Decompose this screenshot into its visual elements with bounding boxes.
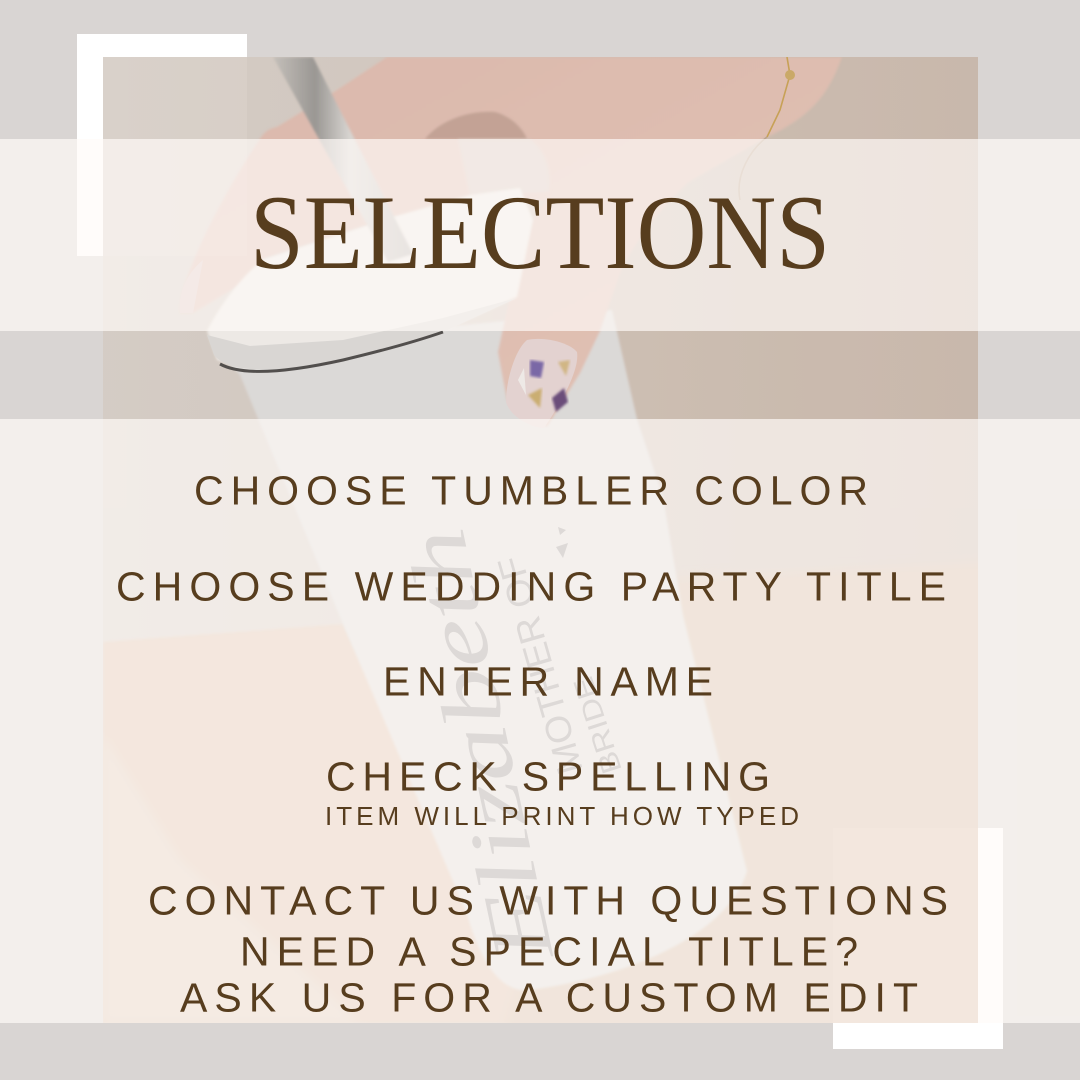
step: spelling: CHECK SPELLING: [326, 754, 770, 800]
decorative corner bracket: top left: [77, 34, 247, 256]
tumbler lid: [207, 188, 533, 370]
instruction list: [116, 468, 948, 1020]
palm and fingers: [260, 57, 842, 425]
photo backdrop wall: [103, 57, 978, 574]
contact line: CONTACT US WITH QUESTIONS: [148, 878, 948, 924]
shadow between fingers: [425, 112, 527, 139]
spelling note: ITEM WILL PRINT HOW TYPED: [325, 801, 799, 831]
special title question: NEED A SPECIAL TITLE?: [240, 928, 858, 974]
small mark: [556, 543, 568, 558]
step: name: ENTER NAME: [383, 658, 713, 704]
custom edit line: ASK US FOR A CUSTOM EDIT: [180, 974, 918, 1020]
nail of index finger: [180, 260, 203, 313]
lid seal line: [220, 332, 443, 371]
wooden table right: [500, 562, 990, 1040]
photo: hand holding a personalised tumbler: [103, 57, 990, 1040]
tumbler personalisation: [411, 527, 621, 956]
wooden table left: [104, 632, 258, 918]
title line one: MOTHER OF: [489, 552, 591, 779]
pale streak on table: [103, 735, 360, 1023]
bracelet: [739, 57, 795, 200]
title line two: BRIDE: [567, 673, 628, 778]
step: tumbler colour: CHOOSE TUMBLER COLOR: [194, 468, 868, 514]
translucent title band: [0, 139, 1080, 331]
metal straw: [273, 57, 413, 262]
script name: Elizabeth: [389, 521, 572, 972]
step: party title: CHOOSE WEDDING PARTY TITLE: [116, 564, 946, 610]
lid rim: [208, 331, 444, 369]
decorative corner bracket: bottom right: [833, 828, 1003, 1049]
tumbler body: [217, 310, 747, 990]
title: SELECTIONS: [250, 174, 830, 291]
painted thumb nail: [506, 339, 577, 428]
finger behind lid: [459, 138, 526, 139]
translucent content band: [0, 419, 1080, 1023]
